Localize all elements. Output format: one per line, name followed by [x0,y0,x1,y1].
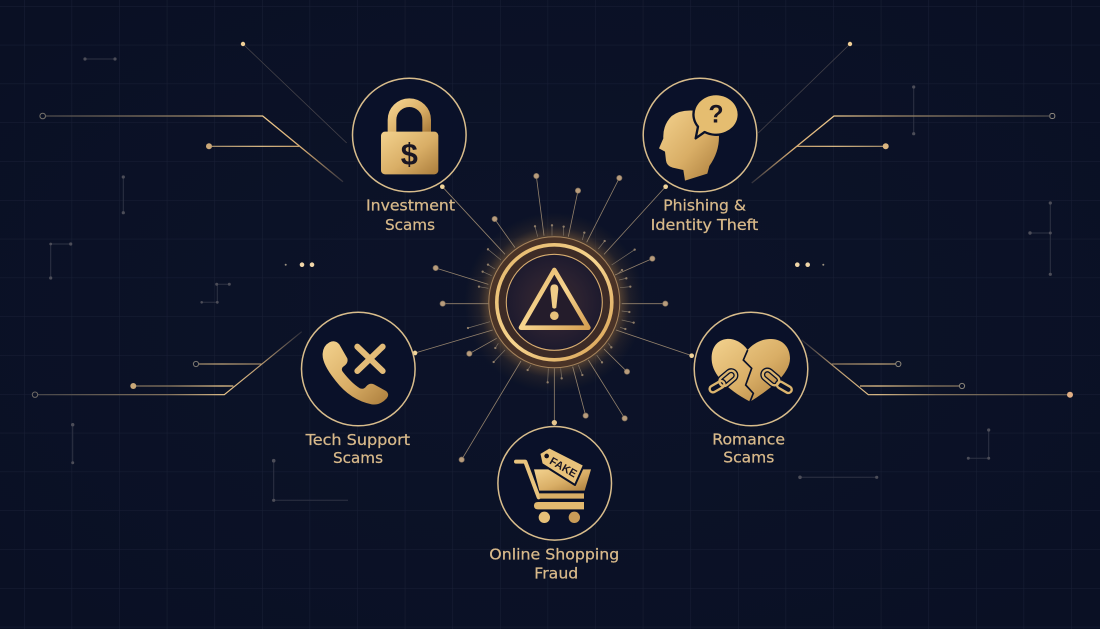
icon: padlock with dollar: $ [401,137,418,171]
icon: shopping cart with fake tag: FAKE [547,455,579,480]
node: romance scams [694,312,808,467]
node: online shopping fraud [489,426,619,582]
central alert hub [489,237,620,368]
label: investment scams: Scams [385,216,435,234]
label: tech support scams: Tech Support [305,431,410,449]
label: online shopping fraud: Online Shopping [489,545,619,563]
circuit lines: upper right [752,42,1055,183]
circuit lines: upper left [40,42,347,182]
label: tech support scams: Scams [333,449,383,467]
icon: phone with cross [323,341,388,405]
radiating spokes [413,173,694,462]
icon: head with question bubble [659,94,739,181]
label: romance scams [712,430,785,467]
node: phishing and identity theft [643,78,758,234]
icon: padlock with dollar [381,103,438,174]
circuit lines: lower left [32,332,302,397]
label: phishing and identity theft: Identity Theft [651,216,758,234]
node: tech support scams [302,312,415,467]
label: romance scams: Scams [723,449,774,467]
decorative dots left [285,262,314,267]
label: investment scams: Investment [366,197,455,215]
circuit lines: lower right [802,340,1073,398]
label: online shopping fraud: Fraud [534,564,578,582]
icon: broken heart with chains [708,339,793,402]
label: phishing and identity theft [651,197,758,234]
label: investment scams [366,197,455,234]
decorative dots right [795,262,824,267]
label: tech support scams [305,431,410,467]
label: romance scams: Romance [712,430,785,448]
icon: warning triangle [521,270,588,328]
icon: head with question bubble: ? [708,102,724,129]
node: investment scams [352,78,466,234]
central alert hub glow [464,212,644,392]
faint circuit traces [49,57,1052,502]
label: online shopping fraud [489,545,619,582]
label: phishing and identity theft: Phishing & [663,197,746,215]
icon: shopping cart with fake tag [516,447,591,523]
